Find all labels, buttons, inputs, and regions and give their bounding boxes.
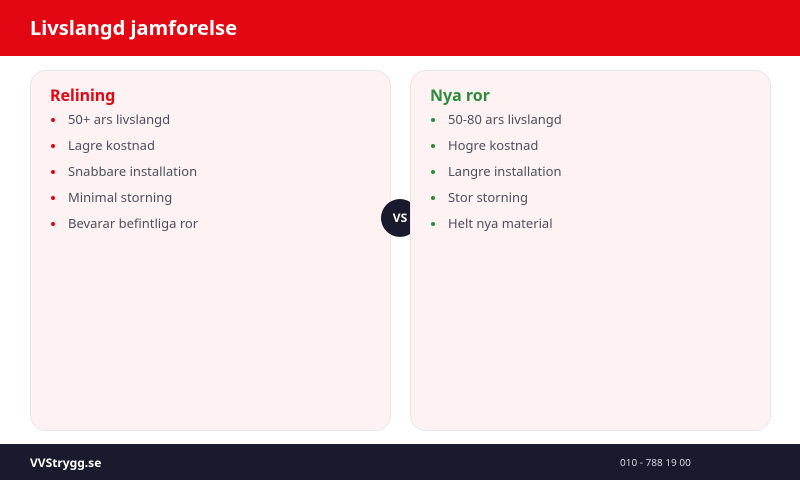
list item: disruption: Stor storning xyxy=(448,188,528,206)
heading: Nya ror: Nya ror xyxy=(430,84,490,106)
phone number: 010 - 788 19 00 xyxy=(620,455,691,469)
VS badge xyxy=(381,199,419,237)
list item: preservation: Bevarar befintliga ror xyxy=(68,214,198,232)
VS badge: VS xyxy=(393,209,407,226)
list item: cost: Hogre kostnad xyxy=(448,136,538,154)
footer bar xyxy=(0,444,800,480)
list item: lifespan: 50+ ars livslangd xyxy=(68,110,170,128)
header bar xyxy=(0,0,800,56)
heading: Relining: Relining xyxy=(50,84,115,106)
brand name: VVStrygg.se xyxy=(30,454,101,471)
panel: Relining xyxy=(30,70,391,431)
title: Livslangd jamforelse xyxy=(30,14,237,41)
panel: Nya ror xyxy=(410,70,771,431)
list item: disruption: Minimal storning xyxy=(68,188,172,206)
list item: material: Helt nya material xyxy=(448,214,553,232)
list item: lifespan: 50-80 ars livslangd xyxy=(448,110,562,128)
list item: cost: Lagre kostnad xyxy=(68,136,155,154)
list item: installation: Snabbare installation xyxy=(68,162,197,180)
list item: installation: Langre installation xyxy=(448,162,562,180)
